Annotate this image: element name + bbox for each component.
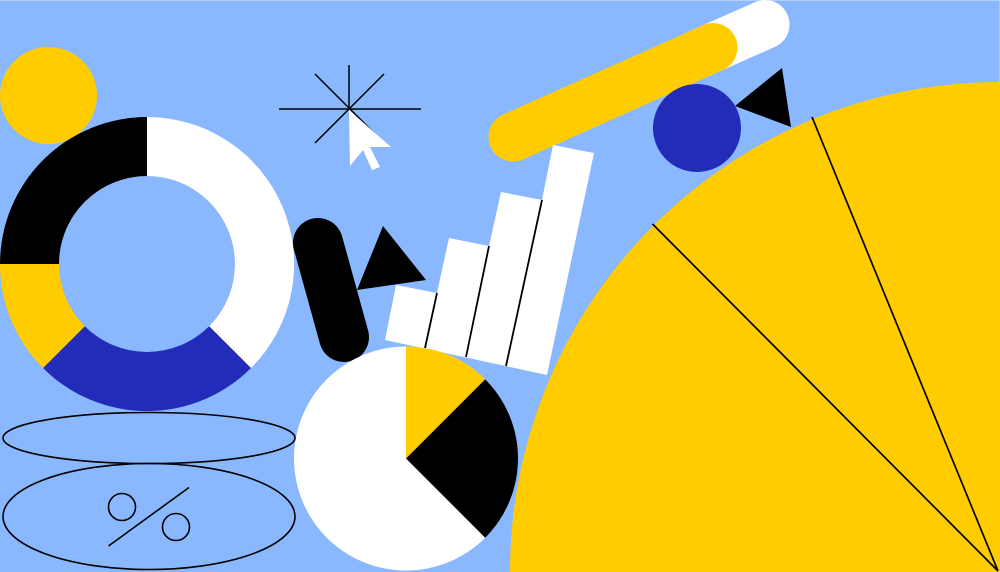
pie chart (294, 346, 518, 570)
blue circle (653, 84, 741, 172)
donut segment: blue (43, 326, 251, 411)
donut segment: yellow (0, 264, 85, 368)
pie slice: black (406, 379, 518, 538)
pie slice: yellow (406, 346, 485, 458)
icon: cursor arrow (349, 110, 391, 170)
yellow capsule (513, 48, 713, 137)
quarter circle pie: large yellow (510, 82, 1000, 572)
black triangle right (735, 68, 791, 127)
white capsule (700, 24, 765, 53)
donut segment: black (0, 117, 147, 264)
black triangle left (357, 226, 426, 290)
burst lines (279, 65, 421, 143)
yellow circle (0, 47, 97, 144)
black capsule (318, 243, 344, 337)
donut segment: white (147, 117, 294, 368)
outlined ellipse bottom (3, 464, 295, 570)
outlined ellipse top (3, 412, 295, 464)
icon: percent sign (108, 488, 190, 546)
bar chart (385, 145, 594, 375)
pie slice: white (294, 346, 518, 570)
donut chart (0, 117, 294, 411)
